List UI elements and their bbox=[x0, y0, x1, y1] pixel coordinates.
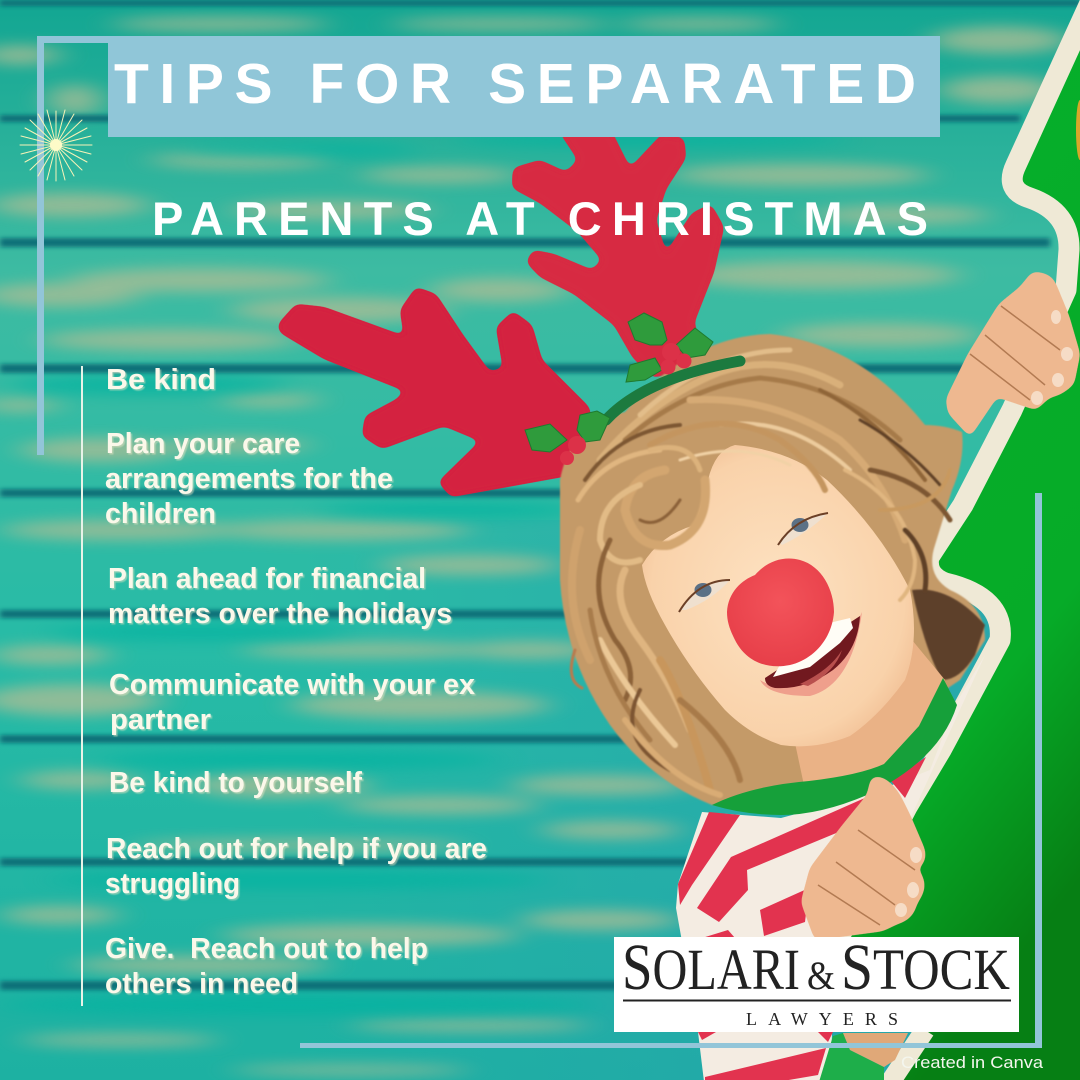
neck bbox=[795, 640, 945, 790]
reindeer antler: front left bbox=[278, 287, 592, 497]
stray wisp bbox=[571, 650, 582, 688]
tip 2: children bbox=[105, 498, 216, 530]
title: line 2: PARENTS AT CHRISTMAS bbox=[152, 192, 928, 245]
tip 5: Be kind to yourself bbox=[109, 767, 362, 799]
smile bbox=[760, 612, 862, 696]
sleeve cuff bbox=[819, 1033, 884, 1080]
tip 3: matters over the holidays bbox=[108, 598, 452, 630]
logo: Solari & Stock Lawyers: STOCK bbox=[841, 931, 1010, 1004]
child bbox=[560, 272, 1080, 1080]
tip 2 bbox=[105, 428, 393, 530]
logo: Solari & Stock Lawyers: SOLARI bbox=[622, 931, 800, 1004]
logo: Solari & Stock Lawyers bbox=[614, 931, 1019, 1032]
tip 7 bbox=[105, 933, 428, 1000]
logo: Solari & Stock Lawyers: LAWYERS bbox=[746, 1009, 898, 1029]
dark hair behind right cheek bbox=[912, 589, 985, 680]
credit: Created in Canva: Created in Canva bbox=[901, 1054, 1044, 1072]
tip 6: struggling bbox=[105, 868, 240, 900]
tip 7: Give. Reach out to help bbox=[105, 933, 428, 965]
tip 2: arrangements for the bbox=[105, 463, 393, 495]
shirt bbox=[676, 655, 985, 1080]
list divider line bbox=[81, 366, 83, 1006]
tip 6: Reach out for help if you are bbox=[106, 833, 487, 865]
lower hand bbox=[801, 777, 925, 940]
tip 3 bbox=[108, 563, 452, 630]
tip 2: Plan your care bbox=[106, 428, 300, 460]
tip 3: Plan ahead for financial bbox=[108, 563, 426, 595]
tip 4: Communicate with your ex bbox=[109, 669, 475, 701]
eye: right bbox=[778, 513, 828, 545]
tip 4 bbox=[109, 669, 475, 736]
eye: left bbox=[679, 580, 730, 612]
hair bbox=[560, 334, 985, 805]
reindeer antler: rear right bbox=[512, 130, 724, 378]
left frame bracket bbox=[37, 36, 110, 455]
icon: sparkle starburst bbox=[20, 110, 92, 181]
hair strands bbox=[571, 350, 950, 795]
temple curl bbox=[625, 470, 706, 546]
bottom-right frame bracket bbox=[300, 493, 1042, 1048]
title: line 1: TIPS FOR SEPARATED bbox=[114, 52, 916, 116]
collar bbox=[712, 678, 957, 815]
clown nose bbox=[727, 559, 834, 666]
upper hand bbox=[946, 272, 1080, 437]
logo: Solari & Stock Lawyers: & bbox=[807, 953, 835, 998]
tip 1: Be kind bbox=[106, 364, 216, 396]
title panel bbox=[108, 36, 940, 137]
christmas tree cut-out bbox=[835, 0, 1080, 1080]
tips list bbox=[105, 364, 487, 1000]
face bbox=[642, 445, 914, 746]
headband and holly bbox=[525, 313, 740, 465]
tip 6 bbox=[105, 833, 487, 900]
tip 7: others in need bbox=[105, 968, 298, 1000]
tip 4: partner bbox=[110, 704, 211, 736]
side curls bbox=[572, 530, 590, 660]
wrist bbox=[843, 1033, 908, 1067]
